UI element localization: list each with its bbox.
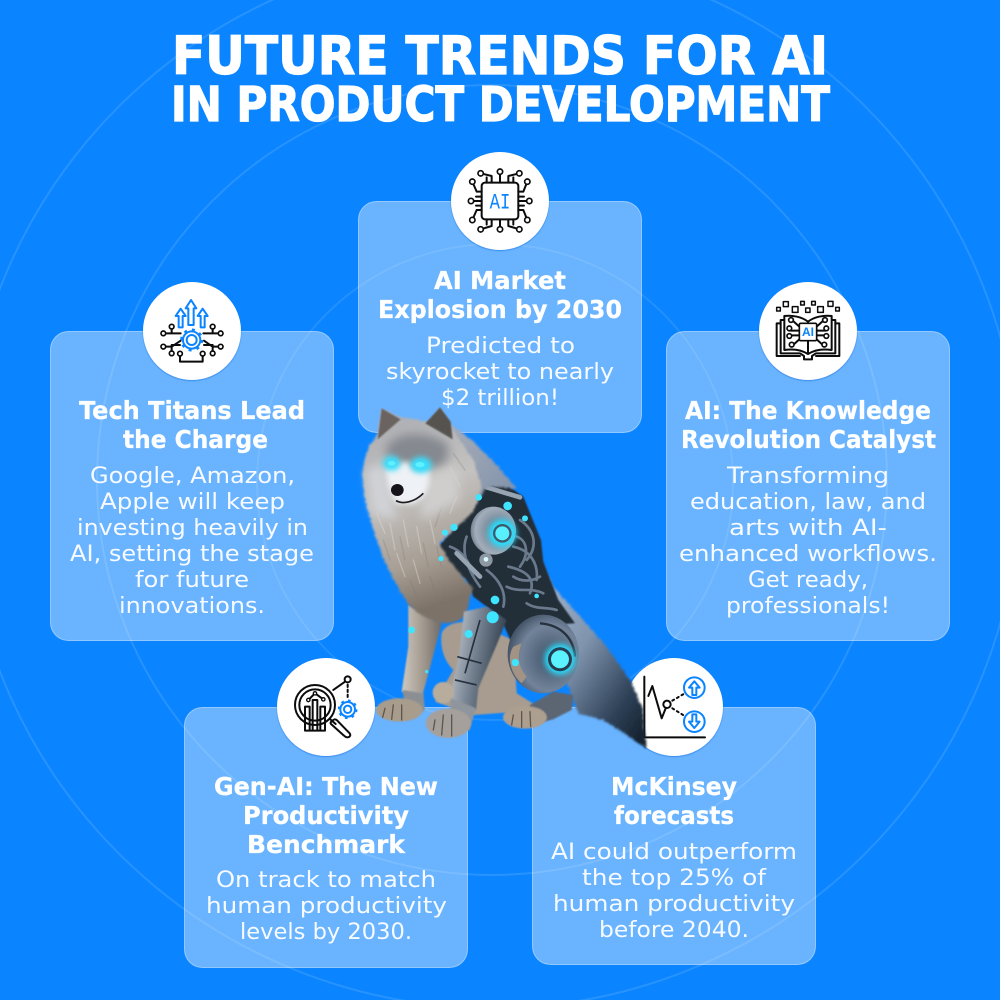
body text: AI could outperform — [551, 839, 797, 865]
heading — [79, 396, 305, 454]
heading — [378, 266, 622, 324]
heading: Revolution Catalyst — [681, 425, 936, 454]
title: FUTURE TRENDS FOR AI — [172, 26, 828, 87]
body text: Google, Amazon, — [90, 463, 295, 489]
title — [171, 26, 830, 133]
body text: arts with AI- — [729, 515, 887, 541]
heading: forecasts — [614, 801, 734, 830]
body text: professionals! — [726, 593, 890, 619]
wolf mechanical torso — [438, 480, 575, 647]
wolf fur and chest — [363, 408, 482, 623]
panel: McKinsey forecasts — [532, 658, 816, 964]
body text: innovations. — [119, 593, 265, 619]
wolf back shading — [450, 423, 517, 508]
body text — [206, 867, 447, 945]
body text — [70, 463, 314, 619]
body text — [679, 463, 937, 619]
heading — [214, 772, 438, 859]
card background — [666, 332, 950, 640]
body text: human productivity — [553, 891, 795, 917]
body text: enhanced workflows. — [679, 541, 937, 567]
heading — [681, 396, 936, 454]
panel: gen-AI productivity — [184, 658, 468, 968]
body text: education, law, and — [690, 489, 926, 515]
body text: for future — [135, 567, 249, 593]
body text: the top 25% of — [582, 865, 767, 891]
heading: Benchmark — [247, 830, 406, 859]
body text: levels by 2030. — [240, 919, 412, 945]
body text: human productivity — [206, 893, 447, 919]
icon: AI chip — [451, 152, 549, 250]
wolf nose and mouth — [391, 484, 423, 503]
illustration: cyborg wolf — [363, 407, 646, 748]
wolf glowing nodes — [408, 494, 539, 673]
body text: Apple will keep — [100, 489, 285, 515]
body text: before 2040. — [599, 917, 749, 943]
card background — [50, 332, 334, 640]
body text: Transforming — [726, 463, 889, 489]
body text: AI, setting the stage — [70, 541, 314, 567]
icon: magnifier analytics — [277, 658, 375, 756]
wolf rear leg — [402, 605, 442, 698]
panel: AI market explosion — [358, 152, 642, 433]
heading: Productivity — [243, 801, 409, 830]
body text — [551, 839, 797, 943]
wolf haunch — [435, 622, 543, 715]
icon: forecast chart — [625, 658, 723, 756]
wolf tail — [537, 553, 646, 748]
wolf eyes — [383, 456, 432, 473]
icon: growth arrows and gear circuit — [143, 282, 241, 380]
heading: Explosion by 2030 — [378, 295, 622, 324]
wolf fur texture — [375, 453, 465, 607]
heading: Gen-AI: The New — [214, 772, 438, 801]
heading: McKinsey — [611, 772, 737, 801]
icon: AI chip: AI — [490, 191, 510, 216]
heading: the Charge — [123, 425, 268, 454]
body text: Get ready, — [748, 567, 868, 593]
panel: tech titans — [50, 282, 334, 640]
wolf front leg — [449, 607, 507, 710]
heading: Tech Titans Lead — [79, 396, 305, 425]
card background — [532, 708, 816, 964]
wolf face — [366, 434, 460, 520]
icon: AI book: AI — [802, 325, 814, 339]
icon: AI book — [759, 282, 857, 380]
body text: $2 trillion! — [441, 385, 559, 411]
body text — [386, 333, 614, 411]
wolf shoulder disc — [471, 507, 516, 567]
body text: skyrocket to nearly — [386, 359, 614, 385]
heading — [611, 772, 737, 830]
wolf paws — [376, 682, 573, 738]
card background — [358, 202, 642, 432]
wolf hip disc — [508, 615, 579, 693]
body text: On track to match — [216, 867, 436, 893]
body text: Predicted to — [426, 333, 575, 359]
body text: investing heavily in — [77, 515, 308, 541]
title: IN PRODUCT DEVELOPMENT — [171, 77, 830, 133]
wolf ears — [378, 407, 453, 439]
heading: AI: The Knowledge — [685, 396, 931, 425]
card background — [184, 708, 468, 968]
wolf cables — [450, 487, 557, 610]
panel: knowledge revolution — [666, 282, 950, 640]
heading: AI Market — [434, 266, 566, 295]
